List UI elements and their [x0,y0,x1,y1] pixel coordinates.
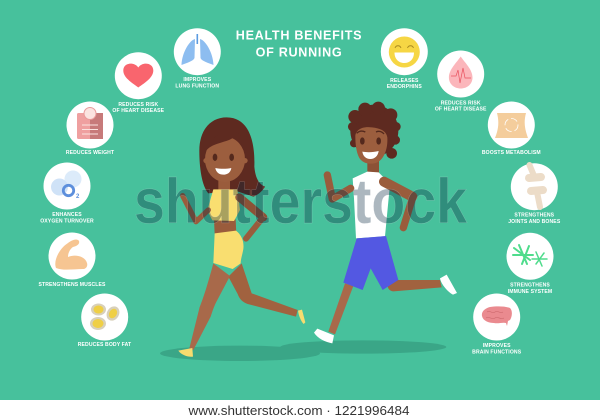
woman's hair [199,117,265,197]
woman's shoes [178,310,305,357]
woman's arms [183,196,263,239]
woman's neck and belly [214,178,236,234]
woman's yellow top [207,189,240,221]
woman's eyes and smile [213,154,234,175]
benefit: improves lung function [174,28,221,90]
benefit: enhances oxygen turnover: 2 [76,194,80,200]
man's front leg [328,283,353,334]
benefit: reduces body fat: REDUCES BODY FAT [78,342,132,348]
benefit: improves lung function: LUNG FUNCTION [175,84,219,90]
woman's shadow [160,346,320,361]
benefit: enhances oxygen turnover: OXYGEN TURNOVER [40,218,94,224]
benefit: improves brain functions: IMPROVES [483,343,511,349]
benefit: reduces body fat [78,294,132,348]
man's curly hair [348,102,401,159]
figure: man running [280,102,457,354]
benefit: reduces risk of heart disease: REDUCES RISK [118,102,158,108]
benefit: enhances oxygen turnover [40,162,94,224]
benefit: releases endorphins: RELEASES [390,78,419,84]
benefit: reduces risk of heart disease (blood drop): REDUCES RISK [441,100,481,106]
benefit: strengthens muscles: STRENGTHENS MUSCLES [38,282,106,288]
man's face [355,127,387,164]
benefit: strengthens joints and bones: STRENGTHENS [514,213,555,219]
benefit: strengthens joints and bones [508,163,561,225]
benefit: reduces weight [66,102,115,156]
benefit: boosts metabolism: BOOSTS METABOLISM [482,150,541,156]
man's blue shorts [343,236,398,290]
man's neck [367,158,379,173]
benefit: improves lung function: IMPROVES [183,77,212,83]
man's back leg [388,280,442,291]
benefit: enhances oxygen turnover: ENHANCES [52,212,82,218]
woman's front leg [189,263,230,350]
benefit: reduces risk of heart disease (blood drop) [435,50,487,113]
watermark wordmark: shutterstock [134,167,468,237]
benefit: improves brain functions [472,294,522,355]
title: HEALTH BENEFITS [236,28,362,42]
man's shadow [280,340,446,354]
benefit: strengthens immune system [506,233,554,295]
woman's fringe [207,132,245,152]
man's eyes and smile [357,131,384,159]
benefit: strengthens immune system: STRENGTHENS [510,283,550,289]
benefit: releases endorphins: ENDORPHINS [387,84,422,90]
benefit: reduces weight: REDUCES WEIGHT [66,150,115,156]
benefit: strengthens muscles [38,232,106,288]
benefit: releases endorphins [381,28,428,90]
benefit: reduces risk of heart disease [112,52,165,114]
man's shoes [314,275,457,343]
man's white tank top [353,172,390,238]
man's arms [327,175,412,228]
benefit: boosts metabolism [482,102,541,156]
woman's yellow shorts [213,231,244,269]
woman's face [205,137,245,182]
benefit: strengthens joints and bones: JOINTS AND BONES [508,219,561,225]
benefit: reduces risk of heart disease: OF HEART DISEASE [112,108,165,114]
title: OF RUNNING [256,46,342,60]
benefit: reduces risk of heart disease (blood drop): OF HEART DISEASE [435,107,487,113]
title [236,28,362,60]
footer image id: www.shutterstock.com · 1221996484 [187,403,410,418]
benefit: strengthens immune system: IMMUNE SYSTEM [508,289,552,295]
woman's back leg [228,263,298,317]
benefit: improves brain functions: BRAIN FUNCTIONS [472,349,522,355]
figure: woman running [160,117,320,361]
